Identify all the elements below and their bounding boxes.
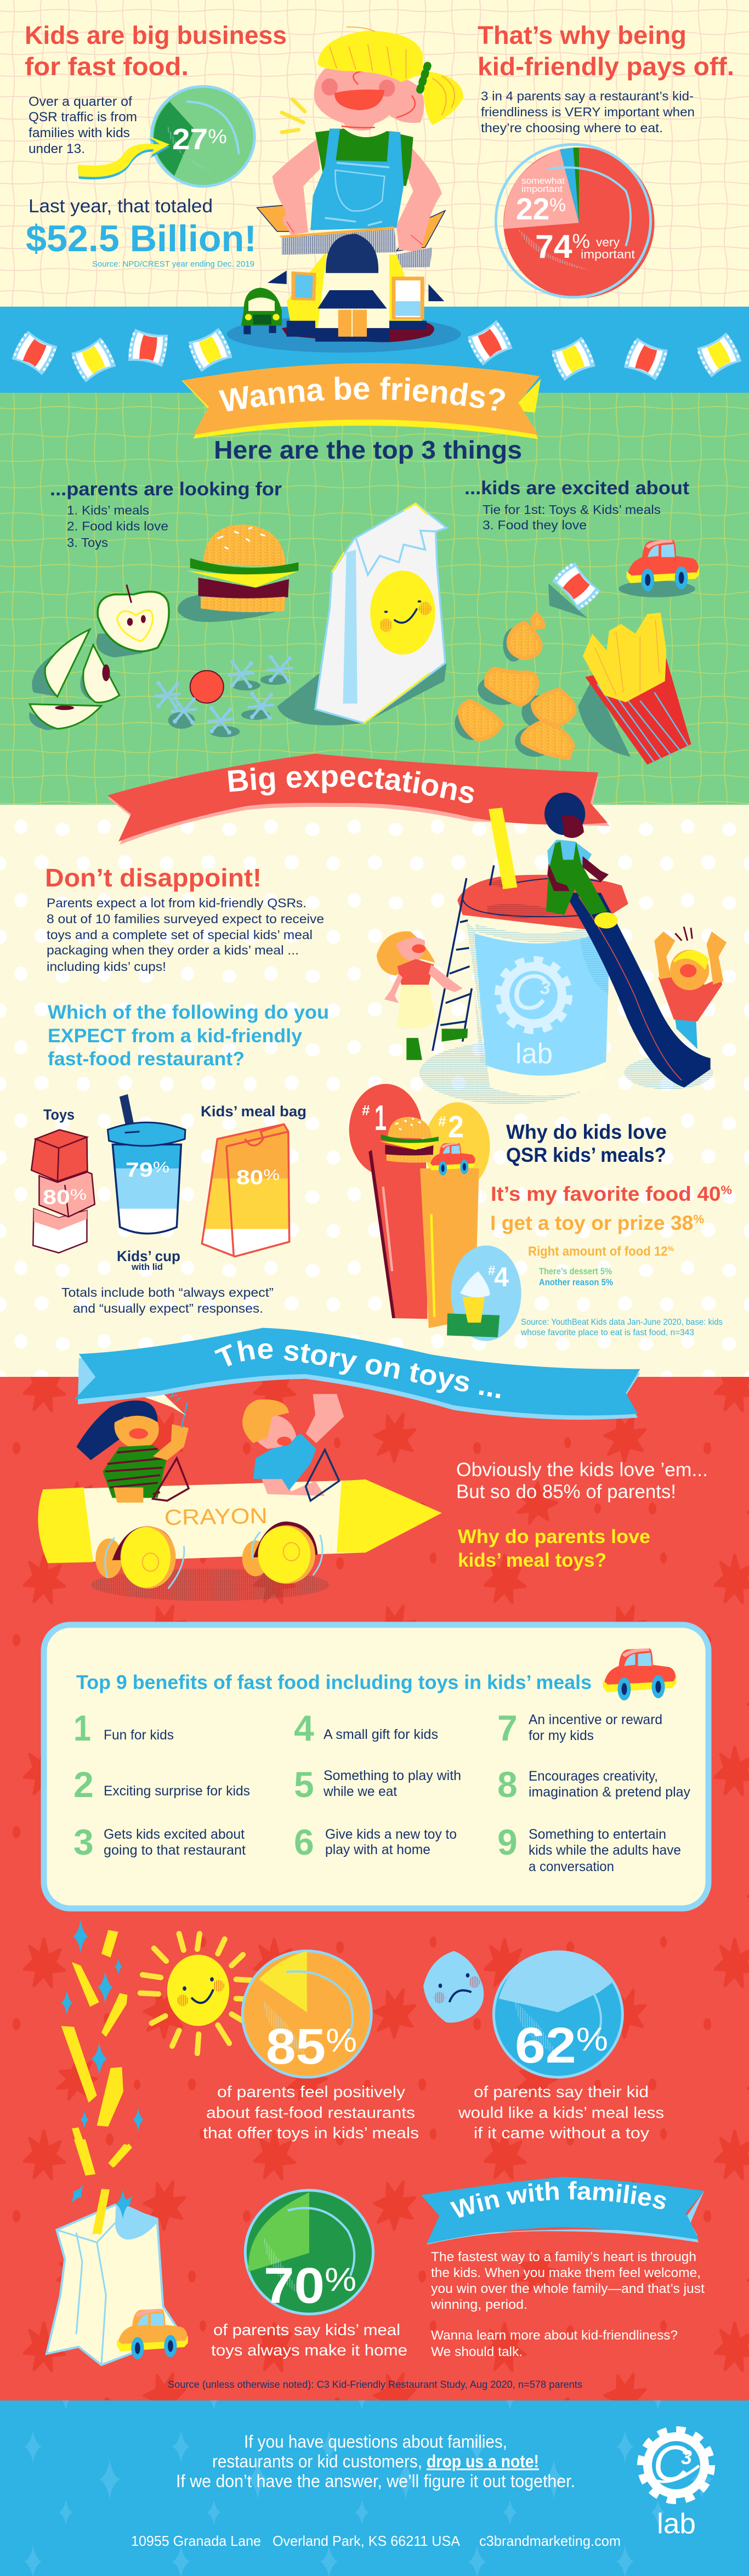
numbers 1 to 9	[73, 1708, 518, 1862]
text: win with families body: We should talk.	[431, 2345, 523, 2359]
pie chart: 27 percent	[151, 87, 254, 187]
chart: toys 80 percent: %	[70, 1186, 87, 1203]
text: parents list: 1. Kids’ meals	[67, 503, 149, 517]
pie chart: 74 percent very important: very	[596, 235, 620, 249]
numbers 1 to 9: 8	[497, 1764, 518, 1805]
text: QSR traffic: under 13.	[29, 142, 85, 156]
pie chart: 74 percent very important: important	[521, 184, 563, 194]
banner: big expectations	[107, 754, 610, 845]
heading: why being kid-friendly pays off: kid-friendly pays off.	[478, 52, 734, 81]
stat: 62 percent: %	[576, 2021, 608, 2058]
chart: podium ranking: 2	[448, 1109, 464, 1144]
chart: kids cup 79 percent: with lid	[131, 1262, 163, 1272]
banner: wanna be friends: Wanna be friends?	[218, 376, 505, 411]
text: parents list: 2. Food kids love	[67, 519, 168, 533]
heading: why do parents love toys: kids’ meal toys?	[458, 1550, 606, 1571]
stat: 70 percent	[211, 2190, 407, 2359]
pie chart: 74 percent very important: 22	[516, 191, 550, 226]
chart: kids cup 79 percent: Kids’ cup	[117, 1248, 180, 1264]
text: kids list: ...kids are excited about	[464, 478, 689, 499]
benefits list: imagination & pretend play	[529, 1784, 690, 1800]
illustration: giant cup with slide and kids	[377, 793, 727, 1104]
source note: YouthBeat	[520, 1318, 723, 1337]
banner: win with families	[421, 2177, 704, 2245]
chart: toys 80 percent	[31, 1106, 95, 1253]
text: win with families body: winning, period.	[430, 2297, 527, 2312]
benefits list: Encourages creativity,	[529, 1769, 658, 1784]
chart: podium ranking: 4	[494, 1262, 509, 1292]
numbers 1 to 9: 2	[73, 1764, 94, 1805]
ranked reasons list: It’s my favorite food 40	[491, 1183, 711, 1205]
text: totals note	[61, 1285, 274, 1315]
heading: top 3 things: Here are the top 3 things	[214, 436, 522, 464]
background: red section	[0, 1377, 749, 2401]
icon: jacks and ball	[155, 655, 292, 737]
text: kids list	[464, 478, 689, 532]
benefits list: An incentive or reward	[529, 1712, 662, 1727]
stat: 85 percent: about fast-food restaurants	[206, 2104, 415, 2122]
text: parents expect: packaging when they order a kids’ meal ...	[47, 943, 299, 957]
text: win with families body	[430, 2250, 705, 2359]
stat: 62 percent: 62	[515, 2018, 571, 2074]
chart: kids meal bag 80 percent: Kids’ meal bag	[201, 1103, 307, 1120]
benefits list: Exciting surprise for kids	[104, 1783, 250, 1799]
background: blue band	[0, 307, 749, 393]
text: 3 in 4 parents: 3 in 4 parents say a restaurant’s kid-	[481, 89, 694, 103]
logo: C3 lab gear	[642, 2431, 711, 2540]
heading: why being kid-friendly pays off: That’s why being	[478, 21, 686, 49]
stat: 85 percent: of parents feel positively	[217, 2083, 406, 2101]
chart: podium ranking	[349, 1084, 521, 1341]
illustration: kids in crayon car	[38, 1393, 442, 1601]
ranked reasons list: I get a toy or prize 38	[490, 1212, 692, 1234]
footer: address	[131, 2533, 621, 2549]
benefits list: A small gift for kids	[324, 1727, 438, 1742]
footer: contact call to action: restaurants or kid customers,	[212, 2451, 422, 2471]
source note: C3 study: Source (unless otherwise noted): C3 Kid-Friendly Restaurant Study, Aug 2020, n=578 parents	[168, 2379, 582, 2390]
illustration: falling fries and sparkles	[61, 1920, 144, 2212]
heading: kids are big business: for fast food.	[25, 52, 189, 81]
heading: top 9 benefits: Top 9 benefits of fast food including toys in kids’ meals	[76, 1671, 592, 1693]
pie chart: 27 percent: 27	[172, 123, 205, 156]
text: last year total: $52.5 Billion!	[26, 218, 257, 259]
illustration: giant cup with slide and kids: 3	[540, 978, 551, 998]
heading: which do you expect	[48, 1002, 329, 1070]
ranked reasons list: Right amount of food 12	[528, 1244, 679, 1259]
chart: kids meal bag 80 percent	[201, 1103, 307, 1257]
ranked reasons list: There’s dessert 5%	[539, 1266, 612, 1276]
text: parents list	[50, 479, 282, 550]
text: QSR traffic	[29, 94, 137, 156]
banner: wanna be friends	[181, 363, 541, 439]
benefits list: kids while the adults have	[529, 1843, 681, 1858]
heading: why do parents love toys	[458, 1526, 650, 1571]
text: totals note: and “usually expect” responses.	[73, 1301, 263, 1315]
text: totals note: Totals include both “always expect”	[61, 1285, 274, 1300]
panel: top 9 benefits	[44, 1625, 708, 1908]
ranked reasons list	[490, 1183, 732, 1287]
footer: contact call to action: drop us a note!	[427, 2451, 539, 2471]
icon: burger	[178, 524, 298, 622]
text: last year total: Last year, that totaled	[29, 196, 213, 217]
stat: 62 percent: of parents say their kid	[474, 2083, 649, 2101]
numbers 1 to 9: 4	[294, 1708, 314, 1748]
footer: contact call to action: If you have questions about families,	[244, 2432, 507, 2451]
illustration: giant cup with slide and kids: C	[512, 964, 548, 1020]
icon: chicken nuggets	[455, 613, 575, 758]
text: win with families body: The fastest way to a family’s heart is through	[431, 2250, 696, 2264]
icon: smiling paper bag	[277, 504, 447, 725]
icon: toy car	[603, 1648, 677, 1701]
chart: kids meal bag 80 percent: 80	[236, 1166, 259, 1189]
text: parents expect: including kids’ cups!	[47, 959, 166, 974]
text: win with families body: the kids. When you make them feel welcome,	[431, 2266, 701, 2280]
stat: 85 percent: %	[326, 2022, 357, 2059]
banner: win with families: Win with families	[450, 2181, 666, 2218]
icons: candy packets	[10, 319, 743, 383]
footer: address: c3brandmarketing.com	[479, 2533, 621, 2549]
text: parents expect: toys and a complete set of special kids’ meal	[47, 928, 313, 942]
benefits list: a conversation	[529, 1859, 614, 1874]
text: kids list: Tie for 1st: Toys & Kids’ meals	[483, 502, 661, 517]
ranked reasons list: %	[693, 1212, 704, 1226]
stat: 70 percent: %	[325, 2261, 356, 2298]
icon: french fries	[578, 613, 691, 765]
pie chart: 74 percent very important	[496, 144, 655, 298]
pie chart: 74 percent very important: %	[572, 230, 590, 252]
text: win with families body: Wanna learn more about kid-friendliness?	[431, 2328, 678, 2343]
stat: 85 percent: 85	[266, 2019, 322, 2075]
heading: why do parents love toys: Why do parents love	[458, 1526, 650, 1547]
text: last year total: Source: NPD/CREST year ending Dec. 2019	[92, 259, 254, 269]
arrow: yellow to pie	[78, 136, 169, 179]
footer: contact call to action: If we don’t have the answer, we’ll figure it out together.	[176, 2471, 575, 2491]
illustration: kids in crayon car: CRAYON	[164, 1504, 268, 1530]
chart: toys 80 percent: Toys	[43, 1106, 75, 1123]
benefits list: Fun for kids	[104, 1727, 174, 1743]
heading: which do you expect: EXPECT from a kid-friendly	[48, 1025, 303, 1047]
banner: big expectations: Big expectations	[228, 767, 474, 803]
heading: kids are big business	[25, 21, 287, 81]
numbers 1 to 9: 1	[73, 1708, 91, 1748]
benefits list: for my kids	[529, 1728, 594, 1743]
text: QSR traffic: Over a quarter of	[29, 94, 132, 109]
source note: YouthBeat: whose favorite place to eat is fast food, n=343	[520, 1328, 694, 1337]
text: obviously the kids love em: But so do 85% of parents!	[456, 1481, 676, 1502]
text: kids list: 3. Food they love	[483, 518, 587, 532]
text: QSR traffic: QSR traffic is from	[29, 110, 137, 125]
heading: why do kids love: QSR kids’ meals?	[506, 1144, 666, 1166]
text: 3 in 4 parents	[481, 89, 695, 135]
heading: why do kids love	[506, 1121, 667, 1166]
benefits list: going to that restaurant	[104, 1843, 246, 1858]
logo: C3 lab gear: 3	[681, 2446, 692, 2468]
benefits list: Gets kids excited about	[104, 1827, 245, 1842]
illustration: restaurant with girl	[227, 27, 463, 353]
chart: kids meal bag 80 percent: %	[263, 1166, 280, 1183]
text: QSR traffic: families with kids	[29, 126, 130, 140]
chart: kids cup 79 percent	[107, 1094, 185, 1272]
stat: 62 percent: if it came without a toy	[474, 2125, 650, 2142]
stat: 85 percent	[203, 1951, 419, 2142]
stat: 70 percent: 70	[264, 2258, 320, 2314]
heading: why being kid-friendly pays off	[478, 21, 734, 81]
numbers 1 to 9: 3	[73, 1822, 94, 1862]
text: parents list: 3. Toys	[67, 535, 108, 550]
pie chart: 74 percent very important: 74	[535, 228, 572, 265]
chart: kids cup 79 percent: %	[153, 1159, 169, 1176]
chart: podium ranking: #	[362, 1102, 370, 1118]
heading: kids are big business: Kids are big business	[25, 21, 287, 49]
background: green grid section	[0, 393, 749, 805]
heading: why do kids love: Why do kids love	[506, 1121, 667, 1143]
ranked reasons list: %	[668, 1244, 674, 1253]
illustration: giant cup with slide and kids: lab	[515, 1038, 553, 1070]
benefits list	[104, 1712, 690, 1874]
text: 3 in 4 parents: friendliness is VERY important when	[481, 105, 695, 119]
footer: address: Overland Park, KS 66211 USA	[273, 2533, 461, 2549]
benefits list: Give kids a new toy to	[325, 1827, 457, 1842]
pie chart: 74 percent very important: important	[581, 247, 635, 261]
stat: 70 percent: toys always make it home	[211, 2342, 407, 2359]
stat: 70 percent: of parents say kids’ meal	[213, 2321, 400, 2339]
banner: the story on toys: The story on toys ...	[214, 1341, 501, 1399]
pie chart: 27 percent: %	[208, 125, 227, 148]
icon: toy car	[619, 540, 699, 597]
heading: which do you expect: fast-food restaurant?	[48, 1048, 245, 1070]
benefits list: Something to play with	[324, 1768, 461, 1783]
text: obviously the kids love em	[456, 1459, 708, 1502]
text: parents expect	[47, 896, 324, 974]
benefits list: Something to entertain	[529, 1827, 666, 1842]
stat: 62 percent: would like a kids’ meal less	[458, 2104, 664, 2122]
icon: candy packet	[548, 560, 602, 618]
source note: YouthBeat: Source: YouthBeat Kids data Jan-June 2020, base: kids	[521, 1318, 723, 1327]
stat: 85 percent: that offer toys in kids’ meals	[203, 2125, 419, 2142]
icon: smiling sun	[140, 1934, 252, 2053]
chart: podium ranking: #	[488, 1263, 495, 1278]
text: last year total	[26, 196, 257, 269]
benefits list: while we eat	[323, 1784, 397, 1799]
text: parents expect: 8 out of 10 families surveyed expect to receive	[47, 912, 324, 926]
background: blue footer	[0, 2400, 749, 2576]
text: win with families body: you win over the whole family—and that’s just	[431, 2281, 705, 2296]
text: obviously the kids love em: Obviously the kids love ’em...	[456, 1459, 708, 1481]
text: parents expect: Parents expect a lot from kid-friendly QSRs.	[47, 896, 307, 910]
logo: C3 lab gear: C	[653, 2436, 690, 2492]
ranked reasons list: %	[721, 1183, 732, 1197]
pie chart: 74 percent very important: %	[549, 195, 566, 216]
benefits list: play with at home	[325, 1842, 430, 1857]
logo: C3 lab gear: lab	[657, 2508, 696, 2540]
illustration: cream bag with orange car	[47, 2189, 188, 2365]
chart: toys 80 percent: 80	[43, 1186, 65, 1208]
text: 3 in 4 parents: they’re choosing where to eat.	[481, 121, 663, 135]
pie chart: 74 percent very important: somewhat	[521, 176, 565, 186]
heading: which do you expect: Which of the following do you	[48, 1002, 329, 1023]
icon: apple	[29, 585, 169, 730]
numbers 1 to 9: 6	[294, 1822, 314, 1862]
chart: kids cup 79 percent: 79	[126, 1159, 148, 1181]
numbers 1 to 9: 9	[497, 1822, 518, 1862]
background: polka dot section	[0, 805, 749, 1377]
icon: sad face	[423, 1951, 484, 2023]
text: parents list: ...parents are looking for	[50, 479, 282, 500]
background: cream grid header	[0, 0, 749, 307]
ranked reasons list: Another reason 5%	[539, 1277, 613, 1287]
chart: podium ranking: #	[438, 1113, 446, 1129]
illustration: kids in crayon car: HOORAY!	[167, 1393, 181, 1403]
stat: 62 percent	[458, 1951, 664, 2142]
numbers 1 to 9: 7	[497, 1708, 518, 1748]
heading: don't disappoint: Don’t disappoint!	[45, 863, 262, 892]
footer: contact call to action	[176, 2432, 575, 2491]
banner: the story on toys	[74, 1327, 640, 1420]
chart: podium ranking: 1	[374, 1098, 387, 1138]
footer: address: 10955 Granada Lane	[131, 2533, 261, 2549]
numbers 1 to 9: 5	[294, 1764, 314, 1805]
